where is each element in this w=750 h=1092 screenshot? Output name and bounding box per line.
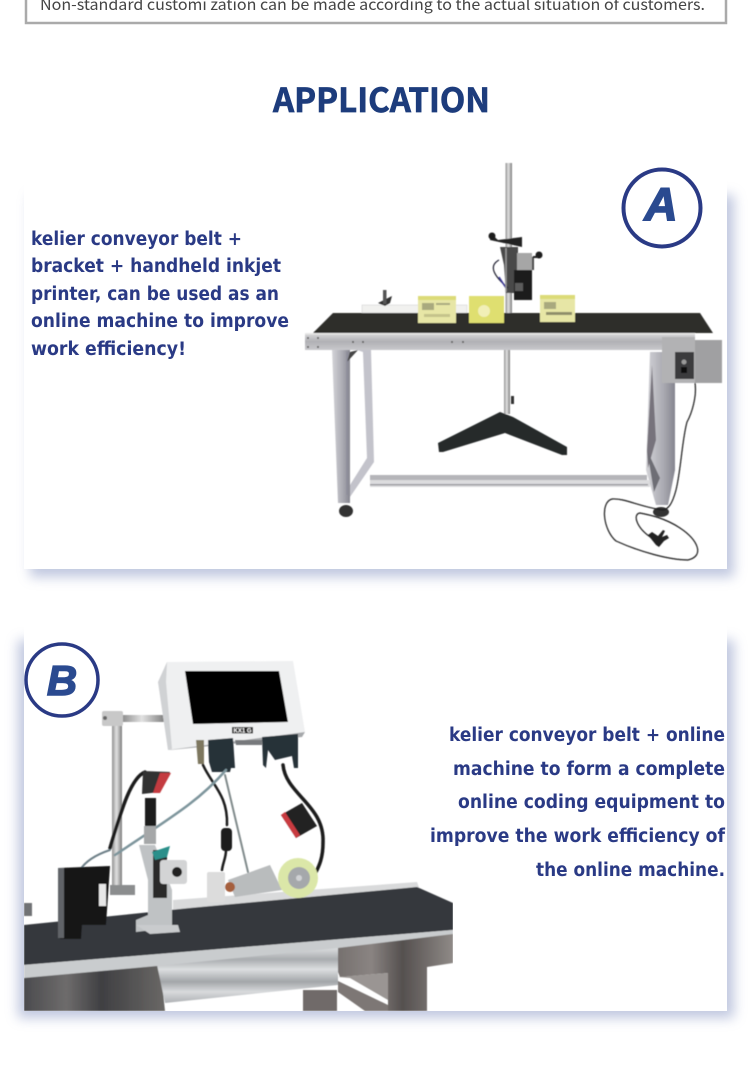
panel: application B: [18, 610, 734, 1018]
text block: application A description: kelier conveyor belt +: [31, 229, 242, 250]
guide rail and knob: [362, 290, 467, 313]
tripod base: [438, 412, 567, 455]
sensor bracket: [136, 798, 187, 934]
note box: [26, 0, 726, 23]
text block: application A description: bracket + handheld inkjet: [31, 256, 281, 277]
cables: [80, 765, 323, 872]
text block: application B description: online coding equipment to: [458, 792, 725, 813]
feet: [339, 505, 669, 517]
illustration: online coding equipment: [24, 661, 453, 1011]
text block: application B description: improve the work efficiency of: [430, 826, 726, 847]
yellow boxes: [418, 295, 575, 323]
badge: A: A: [643, 178, 678, 230]
cable tag: [281, 803, 317, 838]
text block: application A description: online machine to improve: [31, 311, 289, 332]
title: APPLICATION: [272, 74, 490, 122]
panel: application A: [24, 163, 734, 577]
belt: [24, 887, 453, 965]
power cord: [604, 383, 698, 560]
silver belt edge: [24, 930, 453, 978]
badge: B: [26, 644, 98, 716]
print head assembly: [488, 232, 542, 300]
aluminium extrusion: [157, 947, 338, 1003]
badge: B: B: [47, 657, 77, 704]
right leg: [646, 352, 675, 505]
ink cartridge: [58, 866, 135, 939]
cross bar: [370, 475, 650, 487]
lower frame right: [327, 932, 453, 1011]
controller with touch screen: KX1 G: [233, 728, 252, 734]
bracket pole: [504, 163, 514, 414]
rail behind belt: [173, 882, 420, 912]
text block: application B description: kelier conveyor belt + online: [449, 725, 725, 746]
text block: application B description: the online machine.: [536, 860, 725, 881]
frame rail: [305, 333, 695, 350]
ribbon tag: [142, 771, 170, 794]
controller with touch screen: [158, 661, 305, 750]
left leg: [332, 350, 374, 503]
support post: [102, 711, 165, 890]
belt: [313, 313, 713, 333]
badge: A: [624, 170, 700, 246]
illustration: conveyor belt with bracket: [305, 163, 722, 560]
text block: application B description: machine to form a complete: [453, 759, 725, 780]
left stub: [24, 903, 32, 916]
control box: [662, 337, 722, 383]
text block: application A description: work efficiency!: [31, 339, 186, 360]
text block: application A description: printer, can be used as an: [31, 284, 279, 305]
encoder arm and wheel: [207, 858, 318, 902]
plug: [648, 530, 669, 547]
lower frame left: [24, 964, 165, 1011]
serial connectors: [196, 734, 298, 772]
cable ferrite: [221, 828, 232, 851]
frame legs: [303, 973, 388, 1011]
